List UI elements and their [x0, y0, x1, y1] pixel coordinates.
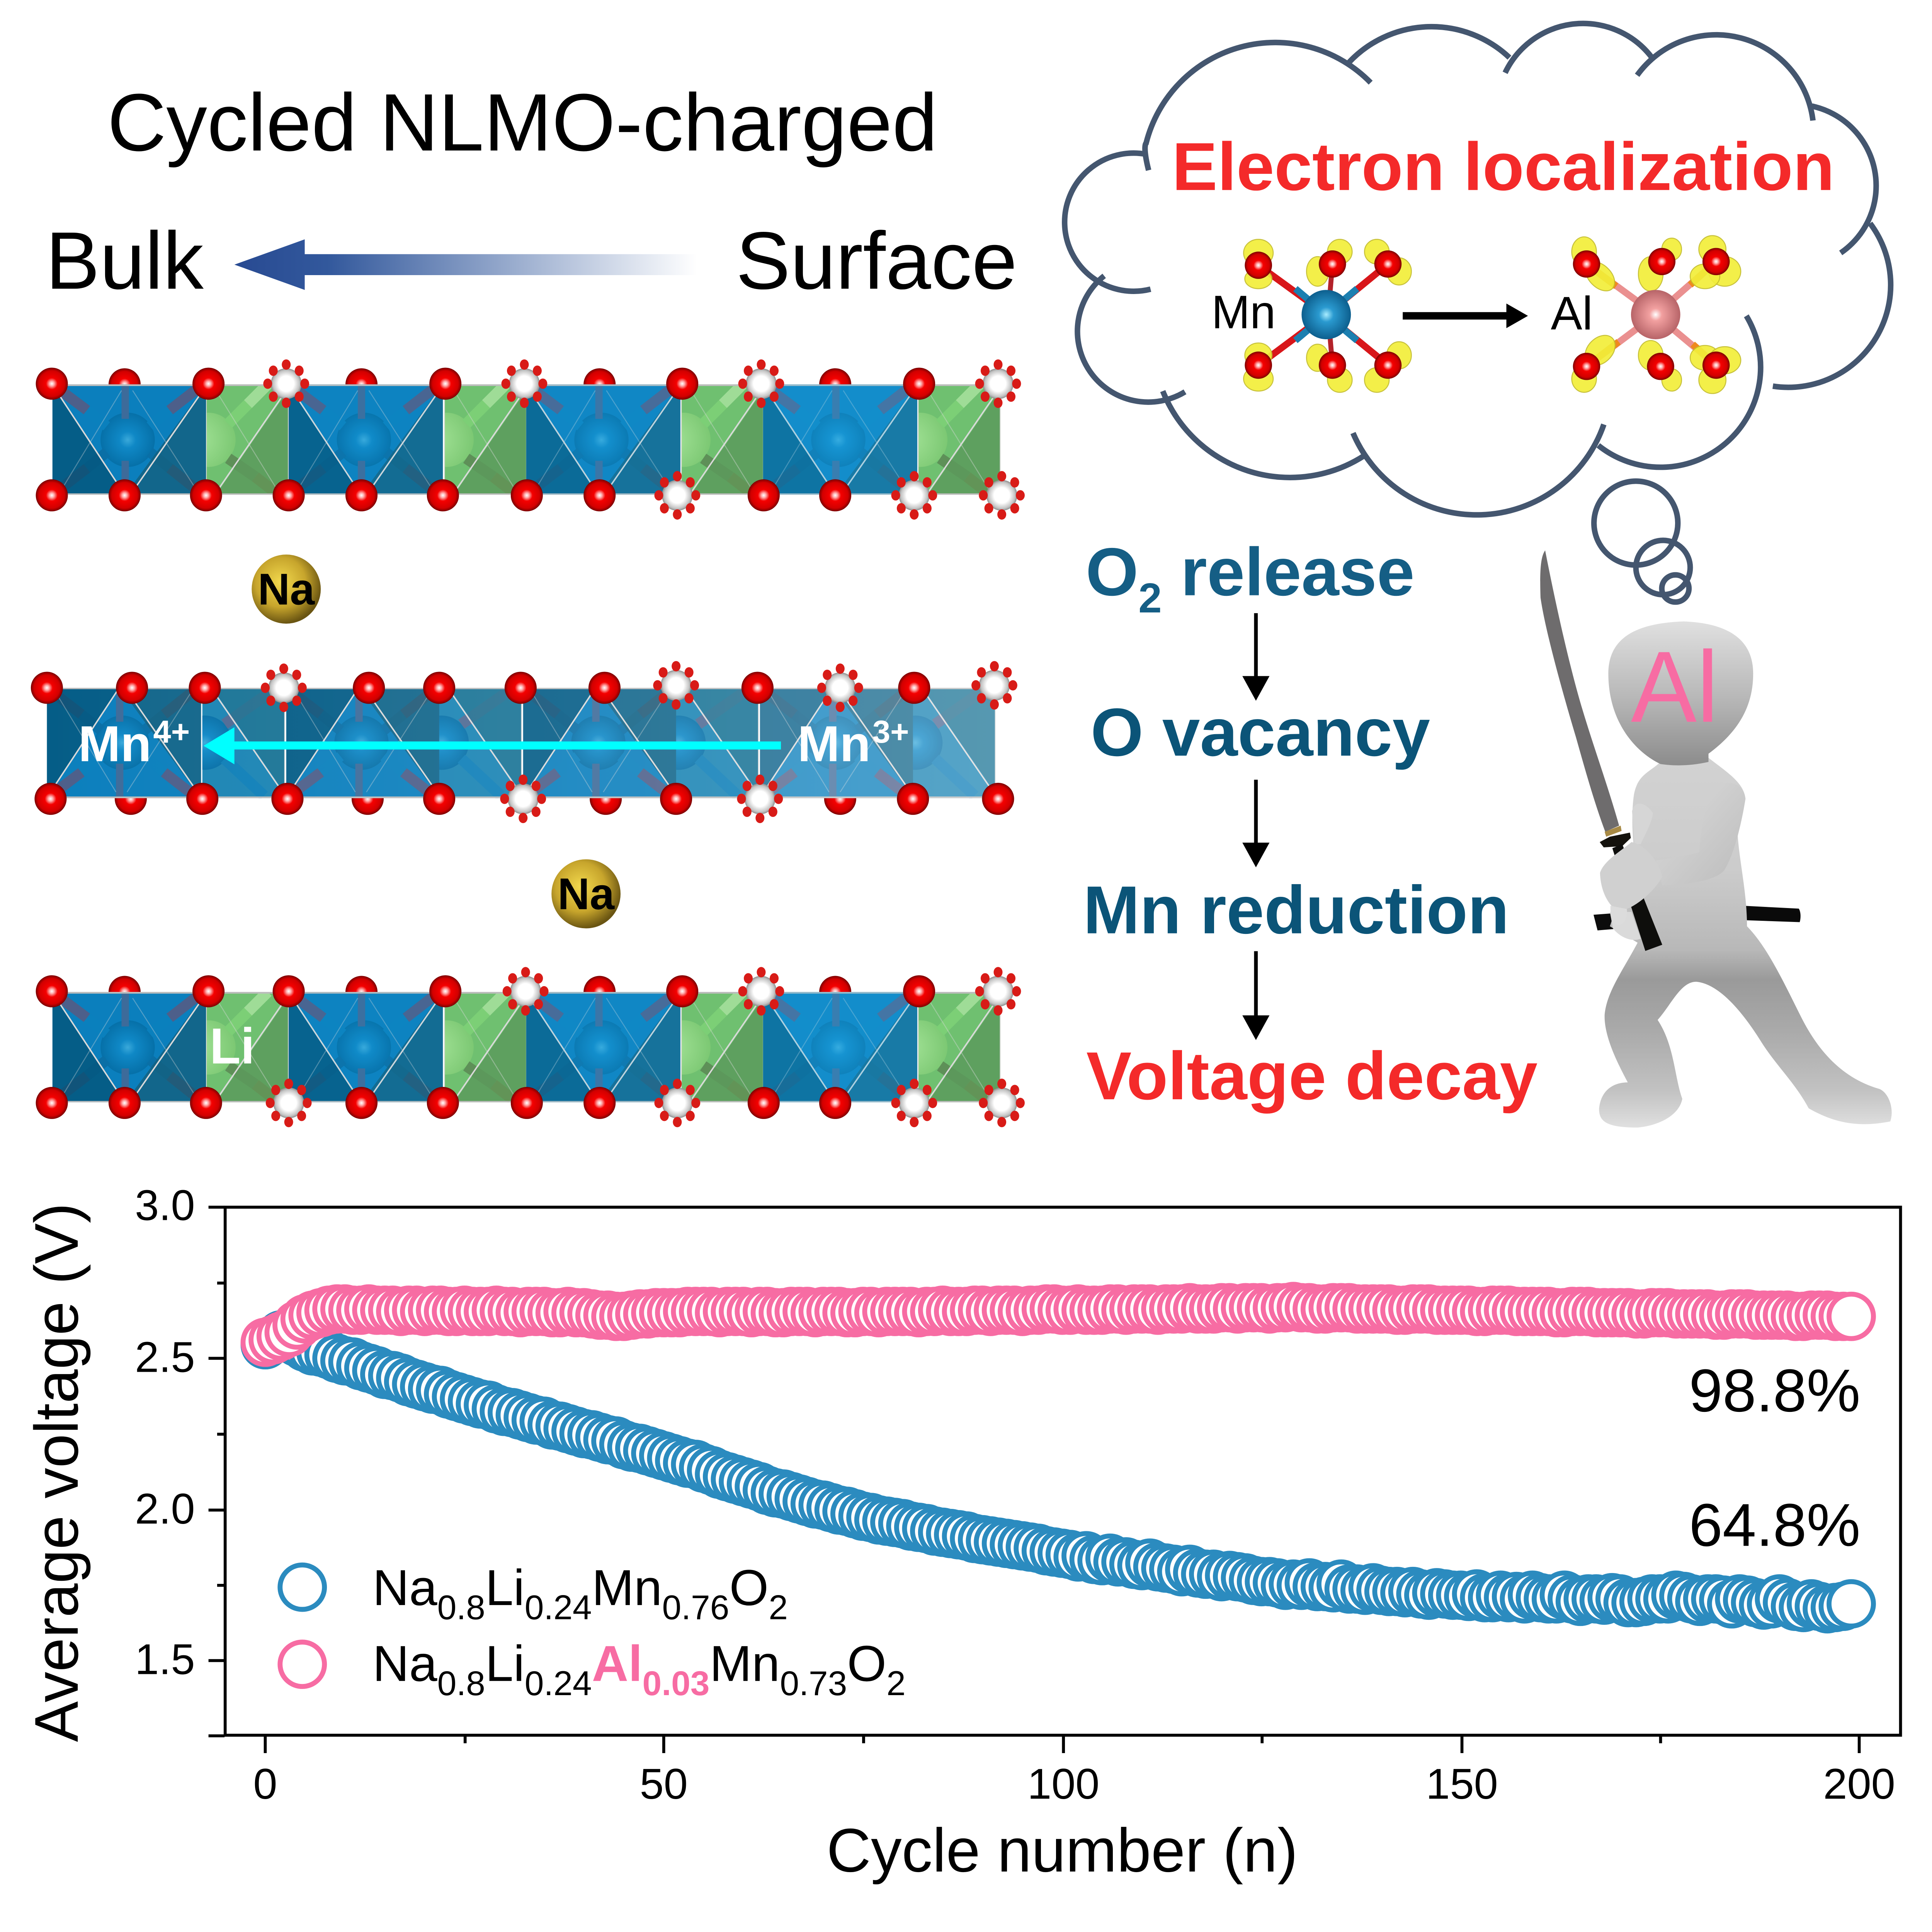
legend label: pristine: Li: [485, 1559, 525, 1616]
x axis tick labels: 50: [640, 1760, 688, 1808]
arrow: step 3: [1242, 951, 1269, 1040]
heading: Electron localization: Electron localization: [1172, 129, 1835, 205]
flow step: Mn reduction: Mn reduction: [1083, 872, 1509, 948]
crystal layer: top transition metal layer: [36, 359, 1025, 520]
label: Mn4+: Mn: [78, 715, 151, 772]
thought bubbles: [1594, 481, 1690, 602]
label: Li: Li: [210, 1017, 255, 1074]
x axis tick labels: 150: [1426, 1760, 1498, 1808]
x axis title: Cycle number (n): [827, 1816, 1298, 1885]
legend label: pristine: 2: [769, 1588, 788, 1627]
chart: average voltage vs cycle number: [22, 1181, 1901, 1885]
legend label: Al-doped: 0.8: [437, 1664, 485, 1702]
legend label: pristine: 0.24: [525, 1588, 592, 1627]
label: Mn: Mn: [1211, 286, 1276, 338]
sodium ion lower: Na: [558, 869, 615, 919]
crystal layer: bottom transition metal layer: [36, 967, 1025, 1127]
label: Surface: Surface: [736, 215, 1017, 306]
label: Mn3+: 3+: [872, 714, 909, 750]
flow step: O2 release: release: [1162, 534, 1415, 610]
legend label: Al-doped: 0.24: [525, 1664, 592, 1702]
sodium ion upper: Na: [258, 565, 315, 614]
figure: samurai with Al head: [1540, 550, 1892, 1128]
flow step: Voltage decay: Voltage decay: [1086, 1038, 1537, 1114]
arrow: step 2: [1242, 780, 1269, 867]
y axis title: Average voltage (V): [22, 1203, 91, 1742]
arrow: Mn to Al: [1403, 303, 1528, 328]
legend label: pristine: Na: [372, 1559, 437, 1616]
legend marker: Al-doped: [280, 1642, 325, 1687]
arrow: step 1: [1242, 613, 1269, 701]
annotation: 64.8%: 64.8%: [1689, 1492, 1861, 1559]
flow step: O2 release: 2: [1138, 575, 1162, 622]
legend label: Al-doped: Mn: [710, 1635, 780, 1692]
legend label: Al-doped: Al: [592, 1635, 643, 1692]
label: Al on head: Al: [1631, 631, 1719, 743]
legend marker: pristine: [280, 1565, 325, 1609]
legend label: Al-doped: 2: [886, 1664, 906, 1702]
legend label: Al-doped: Li: [485, 1635, 525, 1692]
y axis tick labels: 2.5: [135, 1333, 195, 1381]
legend label: Al-doped: 0.73: [780, 1664, 847, 1702]
label: Bulk: Bulk: [46, 215, 204, 306]
legend label: pristine: 0.8: [437, 1588, 485, 1627]
x axis tick labels: 200: [1823, 1760, 1895, 1808]
legend label: Al-doped: 0.03: [643, 1664, 710, 1702]
y axis tick labels: 3.0: [135, 1181, 195, 1230]
crystal layer: middle layer with Mn valence gradient: [31, 661, 1017, 823]
arrow: cyan Mn valence: [204, 727, 781, 764]
annotation: 98.8%: 98.8%: [1689, 1357, 1861, 1425]
sodium ion lower: [551, 859, 621, 929]
x axis tick labels: 100: [1027, 1760, 1099, 1808]
legend label: pristine: Mn: [592, 1559, 662, 1616]
x axis tick labels: [253, 1760, 1895, 1808]
sodium ion upper: [252, 554, 321, 624]
label: Al: Al: [1551, 287, 1593, 339]
y axis tick labels: 2.0: [135, 1485, 195, 1533]
legend label: Al-doped: O: [847, 1635, 886, 1692]
label: Mn3+: Mn: [798, 715, 871, 772]
arrow: surface to bulk gradient: [235, 239, 697, 290]
title: Cycled NLMO-charged: [107, 77, 938, 168]
legend label: pristine: O: [729, 1559, 769, 1616]
thought cloud outline: [1065, 24, 1891, 515]
legend label: pristine: 0.76: [662, 1588, 729, 1627]
flow step: O vacancy: O vacancy: [1090, 695, 1430, 770]
y axis tick labels: [135, 1181, 195, 1684]
legend label: Al-doped: Na: [372, 1635, 437, 1692]
series: Na0.8Li0.24Mn0.76O2: [265, 1335, 1851, 1609]
icon: MnO6 octahedron with electron density: [1243, 239, 1412, 392]
label: Mn4+: 4+: [153, 714, 190, 750]
y axis tick labels: 1.5: [135, 1635, 195, 1684]
icon: AlO6 octahedron with electron density: [1572, 236, 1741, 394]
flow step: O2 release: O: [1086, 534, 1138, 610]
x axis tick labels: 0: [253, 1760, 277, 1808]
plot frame and ticks: [209, 1207, 1901, 1753]
series: Na0.8Li0.24Al0.03Mn0.73O2: [265, 1306, 1851, 1342]
